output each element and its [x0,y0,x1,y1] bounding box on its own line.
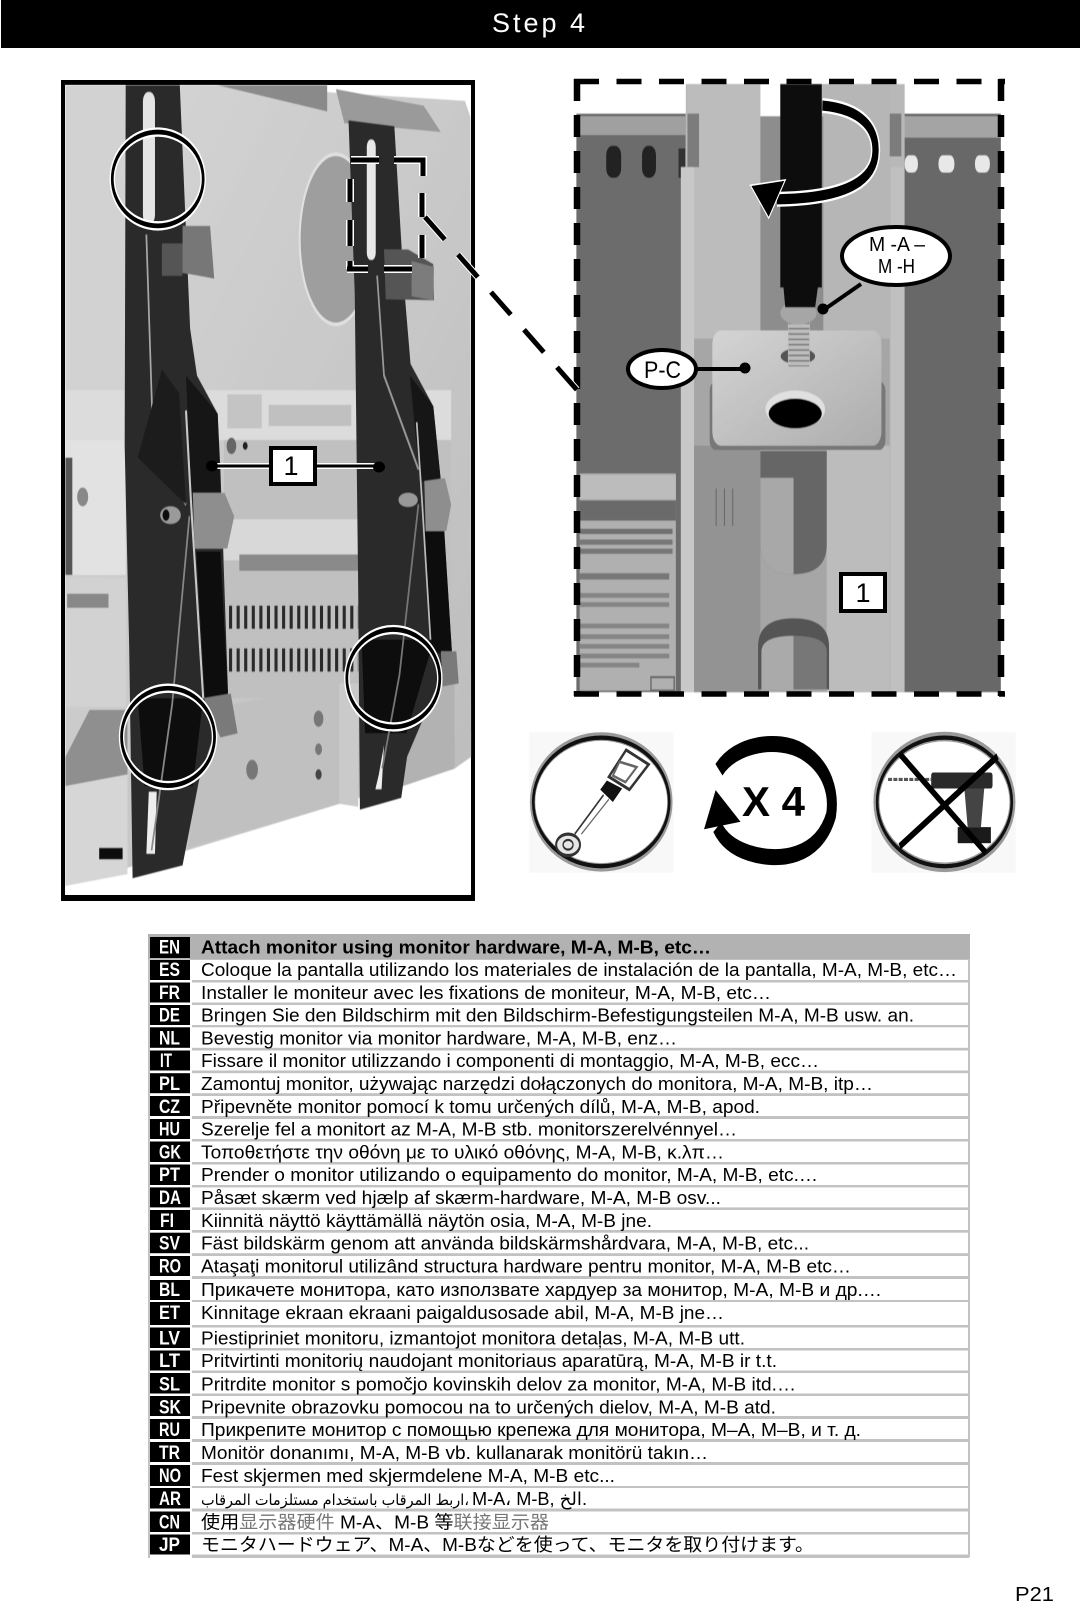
icon: screwdriver [529,732,674,873]
row: SL [150,1373,968,1396]
right bracket [349,120,452,810]
arrow: rotation direction [750,106,876,218]
row: CN: 使用显示器硬件 M-A、M-B 等 联接显示器 [201,1512,549,1532]
panel: monitor back photo [61,80,475,901]
row: AR: M-A، M-B, الخ. [472,1489,587,1510]
callout: M-A to M-H: M -A – [869,234,926,256]
row: DE: Bringen Sie den Bildschirm mit den Bildschirm-Befestigungsteilen M-A, M-B usw. an. [201,1006,914,1026]
row: FI: Kiinnitä näyttö käyttämällä näytön osia, M-A, M-B jne. [201,1211,652,1231]
callout: part 1 close-up: 1 [855,578,871,608]
row: AR [150,1488,968,1510]
callout: part 1 close-up [841,574,885,611]
screwdriver [780,84,822,288]
row: EN: Attach monitor using monitor hardware, M-A, M-B, etc… [201,938,711,958]
row: BL: BL [159,1280,180,1301]
row: IT: IT [160,1051,172,1072]
row: SL: SL [159,1374,180,1396]
row: DE: DE [159,1006,180,1027]
row: NO [150,1465,968,1487]
row: SV: SV [159,1234,180,1255]
panel: close-up photo [574,79,1005,696]
row: ET: ET [159,1303,180,1324]
row: CN [150,1512,968,1534]
icon: no power drill [871,732,1016,873]
row: CZ: Připevněte monitor pomocí k tomu určených dílů, M-A, M-B, apod. [201,1097,760,1117]
row: DA: Påsæt skærm ved hjælp af skærm-hardware, M-A, M-B osv... [201,1188,721,1208]
row: RO: Ataşaţi monitorul utilizând structura hardware pentru monitor, M-A, M-B etc… [201,1256,851,1276]
row: PT [150,1164,968,1186]
callout: part 1 overview: 1 [283,451,299,481]
callout: P-C [628,350,750,388]
row: JP: モニタハードウェア、M-A、M-Bなどを使って、モニタを取り付けます。 [201,1535,814,1555]
screw [788,322,810,366]
row: FR [150,982,968,1004]
row: LV: Piestipriniet monitoru, izmantojot monitora detaļas, M-A, M-B utt. [201,1328,745,1348]
row: DA: DA [159,1188,181,1209]
row: PL: PL [159,1074,180,1095]
row: LV [150,1328,968,1350]
row: CN: CN [159,1512,180,1534]
row: NL [150,1027,968,1049]
row: LT: Pritvirtinti monitorių naudojant monitoriaus aparatūrą, M-A, M-B ir t.t. [201,1351,777,1371]
row: ES: ES [159,960,180,981]
callout circle: top left [112,132,203,226]
row: SK [150,1396,968,1418]
row: HU: HU [159,1120,180,1141]
row: RU [150,1419,968,1441]
left bracket [125,85,228,878]
row: IT: Fissare il monitor utilizzando i componenti di montaggio, M-A, M-B, ecc… [201,1051,819,1071]
row: PT: Prender o monitor utilizando o equipamento do monitor, M-A, M-B, etc.… [201,1165,818,1185]
icon: dashed detail rectangle [347,160,423,269]
row: HU [150,1119,968,1141]
row: CZ: CZ [159,1097,180,1118]
row: ET [150,1302,968,1325]
row: LT: LT [159,1351,180,1372]
row: PT: PT [159,1165,180,1186]
row: NL: NL [159,1028,180,1049]
panel: multilingual instructions [148,934,970,1558]
row: DA [150,1187,968,1209]
row: FI: FI [160,1211,174,1232]
callout: M-A to M-H: M -H [878,256,915,278]
callout: M-A to M-H [818,227,950,314]
row: RU: Прикрепите монитор с помощью крепежа для монитора, M–A, M–B, и т. д. [201,1420,861,1440]
row: AR: AR [159,1489,181,1510]
row: SK: SK [159,1398,181,1418]
row: ES: Coloque la pantalla utilizando los materiales de instalación de la pantalla, M-A, M-B, etc… [201,960,957,980]
row: FR: Installer le moniteur avec les fixations de moniteur, M-A, M-B, etc… [201,983,771,1003]
row: LV: LV [159,1328,180,1350]
row: NL: Bevestig monitor via monitor hardware, M-A, M-B, enz… [201,1028,677,1048]
row: SV [150,1233,968,1255]
row: NO: Fest skjermen med skjermdelene M-A, M-B etc... [201,1466,615,1486]
row: AR: اربط المرقاب باستخدام مستلزمات المرقاب، [201,1492,469,1509]
title: Step 4 [492,8,585,38]
row: SK: Pripevnite obrazovku pomocou na to určených dielov, M-A, M-B atd. [201,1398,776,1418]
row: GK [150,1142,968,1163]
callout: part 1 overview [206,448,385,484]
row: JP [150,1534,968,1556]
label area [227,394,262,428]
callout circle: bottom right [347,630,440,727]
row: BL: Прикачете монитора, като използвате хардуер за монитор, M-A, M-B и др.… [201,1280,882,1300]
row: SV: Fäst bildskärm genom att använda bildskärmshårdvara, M-A, M-B, etc... [201,1234,809,1254]
row: GK: GK [159,1142,181,1163]
icon: repeat four times: X 4 [742,778,806,825]
row: FI [150,1210,968,1232]
row: NO: NO [159,1466,181,1487]
row: FR: FR [159,983,180,1004]
row: EN: EN [159,938,180,958]
row: LT [150,1350,968,1372]
row: CZ [150,1096,968,1118]
row: RU: RU [159,1420,180,1441]
icon: dashed frame [574,79,1005,696]
arrow: dashed leader to close-up [425,217,577,390]
row: RO: RO [159,1256,181,1277]
row: TR [150,1442,968,1464]
row: SL: Pritrdite monitor s pomočjo kovinskih delov za monitor, M-A, M-B itd.… [201,1374,796,1394]
icon: repeat four times [704,744,832,857]
row: IT [150,1050,968,1072]
page number: P21 [1015,1584,1054,1606]
row: JP: JP [159,1535,180,1556]
row: PL: Zamontuj monitor, używając narzędzi dołączonych do monitora, M-A, M-B, itp… [201,1074,873,1094]
header bar [1,0,1080,48]
mounting plate [710,381,885,450]
row: TR: TR [159,1443,180,1464]
row: TR: Monitör donanımı, M-A, M-B vb. kullanarak monitörü takın… [201,1443,708,1463]
callout: P-C: P-C [644,357,681,384]
callout circle: bottom left [122,688,215,786]
row: GK: Τοποθετήστε την οθόνη με το υλικό οθόνης, M-A, M-B, κ.λπ… [201,1142,724,1162]
row: ET: Kinnitage ekraan ekraani paigaldusosade abil, M-A, M-B jne… [201,1303,724,1323]
row: HU: Szerelje fel a monitort az M-A, M-B stb. monitorszerelvénnyel… [201,1120,737,1140]
